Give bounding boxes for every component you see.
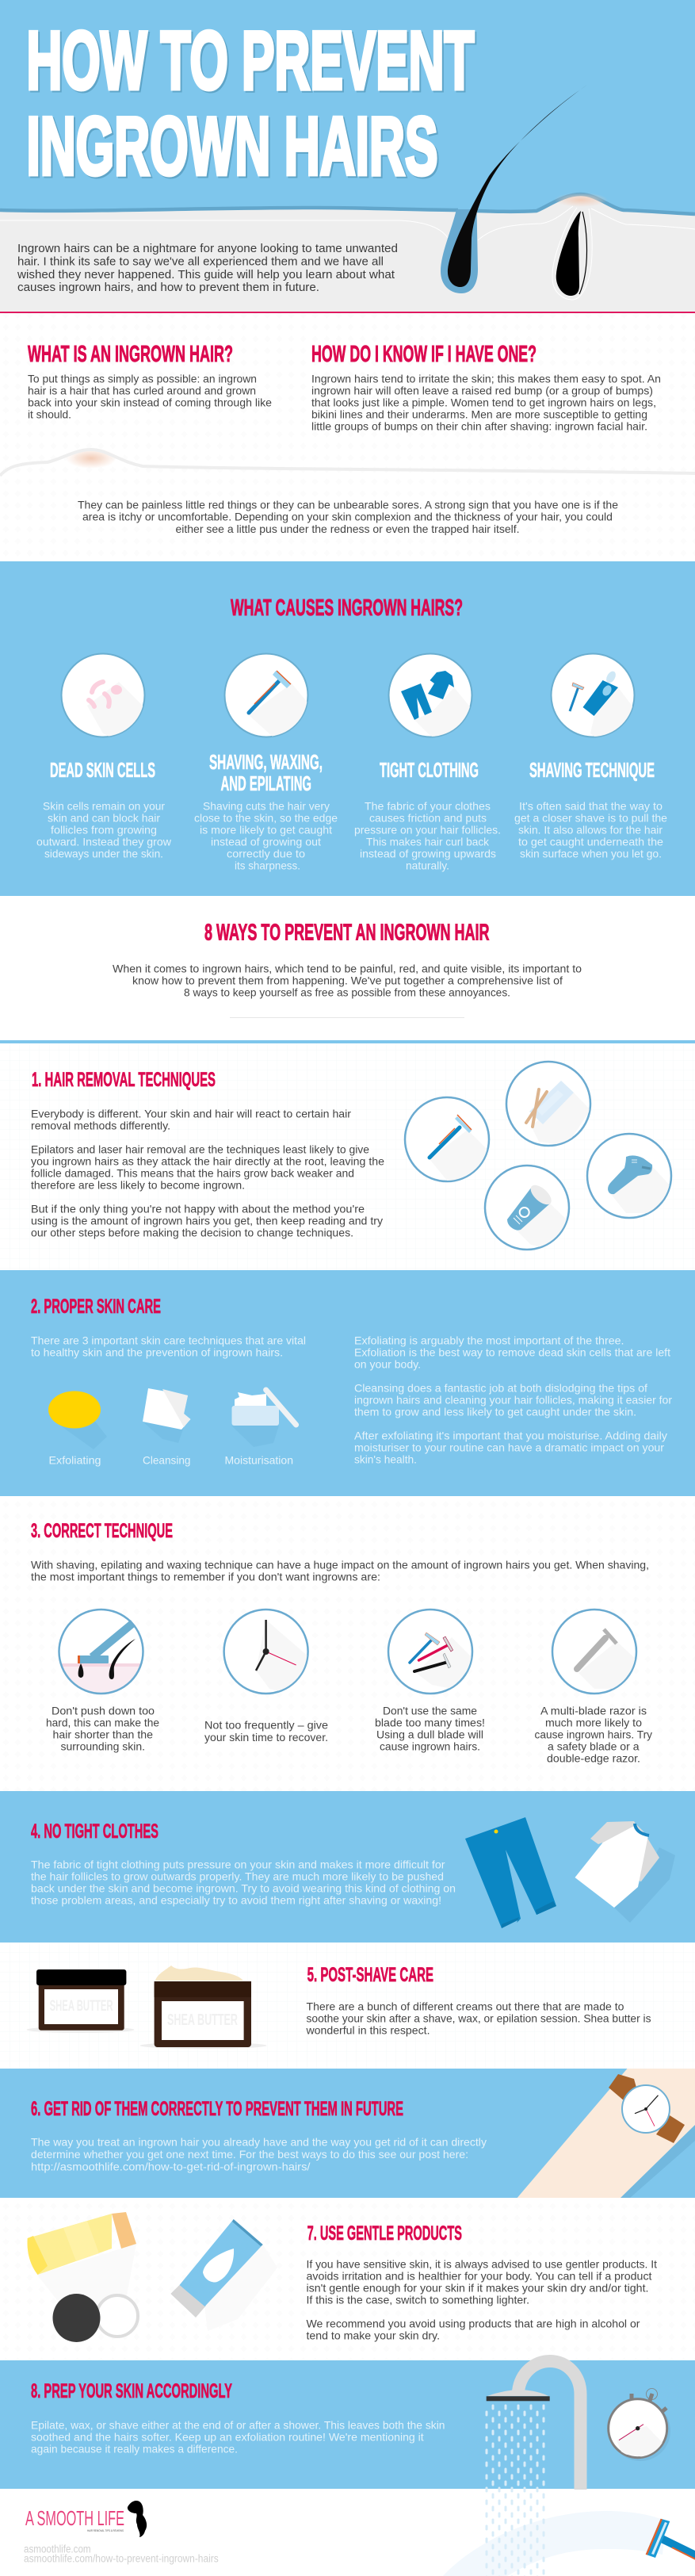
icon: clothes xyxy=(388,653,472,737)
text: step 1: you ingrown hairs as they attack the hair directly at the root, leaving the xyxy=(31,1154,384,1167)
skin surface line xyxy=(0,194,695,214)
text: step 1: therefore are less likely to become ingrown. xyxy=(31,1178,245,1191)
icon: open shea butter jar: SHEA BUTTER xyxy=(167,2011,238,2029)
cause: shaving, waxing, epilating: SHAVING, WAXING, xyxy=(209,750,323,774)
icon: razor and foam can xyxy=(550,653,636,737)
panel: 2 proper skin care xyxy=(0,1270,695,1496)
text: what is: To put things as simply as possible: an ingrown xyxy=(28,373,257,385)
cause: dead skin cells xyxy=(36,758,172,859)
cause: shaving, waxing, epilating: its sharpness. xyxy=(235,859,300,872)
text: step 7: If you have sensitive skin, it is always advised to use gentler products. It xyxy=(306,2258,657,2271)
text: same blade: Using a dull blade will xyxy=(376,1728,483,1741)
text: step 3: the most important things to remember if you don't want ingrowns are: xyxy=(31,1570,380,1583)
icon: razor xyxy=(223,653,309,737)
text: step 2 right: moisturiser to your routine can have a dramatic impact on your xyxy=(354,1441,664,1454)
icon: epilator circle xyxy=(485,1166,572,1250)
text: step 4: those problem areas, and especially try to avoid them right after shaving or waxing! xyxy=(31,1893,441,1906)
text: multi-blade: cause ingrown hairs. Try xyxy=(534,1728,652,1741)
text: step 5: soothe your skin after a shave, wax, or epilation session. Shea butter is xyxy=(306,2012,651,2025)
logo: HAIR REMOVAL TIPS & REVIEWS xyxy=(87,2529,124,2532)
panel: 8 prep your skin xyxy=(0,2360,695,2489)
text: step 7: If this is the case, switch to something lighter. xyxy=(306,2293,529,2306)
cause: shaving technique: It's often said that the way to xyxy=(519,799,663,812)
cause: tight clothing: pressure on your hair follicles. xyxy=(354,823,501,836)
text: how do I know: ingrown hair will often leave a raised red bump (or a group of bumps) xyxy=(311,384,653,396)
cause: shaving technique: skin. It also allows for the hair xyxy=(518,823,663,836)
text: step 2 left: to healthy skin and the prevention of ingrown hairs. xyxy=(31,1346,283,1359)
text: step 1: Everybody is different. Your skin and hair will react to certain hair xyxy=(31,1107,351,1120)
skin cross-section xyxy=(0,194,695,312)
text: symptoms: either see a little pus under the redness or even the trapped hair itself. xyxy=(176,522,520,535)
text: step 1 xyxy=(31,1107,384,1238)
icon: moisturiser jar xyxy=(225,1390,296,1467)
icon: footer razor xyxy=(646,2519,695,2560)
cause: dead skin cells: follicles from growing xyxy=(51,823,157,836)
text: push down: hair shorter than the xyxy=(52,1728,153,1741)
logo: A SMOOTH LIFE xyxy=(25,2506,124,2530)
text: step 1: follicle damaged. This means that the hairs grow back weaker and xyxy=(31,1167,354,1180)
text: step 2 right: After exfoliating it's important that you moisturise. Adding daily xyxy=(354,1429,667,1441)
text: symptoms xyxy=(78,498,618,535)
cause: tight clothing: naturally. xyxy=(406,859,449,872)
text: step 1: But if the only thing you're not happy with about the method you're xyxy=(31,1202,365,1215)
heading: step 1: 1. HAIR REMOVAL TECHNIQUES xyxy=(32,1069,216,1091)
panel: 5 post-shave care xyxy=(0,1943,695,2069)
panel: 4 no tight clothes xyxy=(0,1791,695,1943)
icon: shower xyxy=(485,2361,580,2576)
cause: tight clothing: The fabric of your clothes xyxy=(365,799,491,812)
heading: step 8: 8. PREP YOUR SKIN ACCORDINGLY xyxy=(31,2380,232,2402)
icon: arm with watch xyxy=(517,2069,695,2198)
cause: shaving, waxing, epilating: AND EPILATING xyxy=(220,771,311,795)
text: step 4: the hair follicles to grow outwards properly. They are much more likely to be pushed xyxy=(31,1870,444,1882)
cause: dead skin cells: DEAD SKIN CELLS xyxy=(50,758,155,782)
intro text: causes ingrown hairs, and how to prevent them in future. xyxy=(17,281,319,294)
text: step 1: our other steps before making the decision to change techniques. xyxy=(31,1226,353,1238)
text: same blade: cause ingrown hairs. xyxy=(380,1740,480,1752)
heading: step 5: 5. POST-SHAVE CARE xyxy=(307,1964,433,1986)
text: step 6: http://asmoothlife.com/how-to-get-rid-of-ingrown-hairs/ xyxy=(31,2160,311,2172)
source links: asmoothlife.com/how-to-prevent-ingrown-hairs xyxy=(24,2553,219,2564)
text: step 8 xyxy=(31,2418,445,2455)
icon: t-shirt xyxy=(575,1821,675,1923)
cause: shaving, waxing, epilating: correctly due to xyxy=(227,847,305,859)
text: step 3 xyxy=(31,1559,649,1583)
panel: what causes ingrown hairs xyxy=(0,561,695,896)
heading: causes: WHAT CAUSES INGROWN HAIRS? xyxy=(231,595,463,621)
text: push down: Don't push down too xyxy=(52,1705,155,1717)
cause: tight clothing: TIGHT CLOTHING xyxy=(380,758,479,782)
text: 8 ways: 8 ways to keep yourself as free as possible from these annoyances. xyxy=(184,986,510,999)
text: step 7: avoids irritation and is healthier for your body. You can tell if a product xyxy=(306,2269,652,2282)
icon: wax strip circle xyxy=(506,1062,590,1146)
text: symptoms: They can be painless little red things or they can be unbearable sores. A strong sign that you have one is if the xyxy=(78,498,618,511)
panel: 7 use gentle products xyxy=(0,2198,695,2360)
icon: compact mirror xyxy=(52,2294,138,2342)
icon: pressing razor xyxy=(58,1608,144,1695)
cause: shaving technique: to get caught underneath the xyxy=(518,836,663,848)
heading: step 6: 6. GET RID OF THEM CORRECTLY TO PREVENT THEM IN FUTURE xyxy=(31,2098,403,2120)
logo xyxy=(25,2501,147,2537)
text: step 4: back under the skin and become ingrown. Try to avoid wearing this kind of clothing on xyxy=(31,1882,456,1895)
text: multi-blade: A multi-blade razor is xyxy=(540,1705,647,1717)
text: step 2 right: skin's health. xyxy=(354,1453,417,1465)
text: step 2 right: on your body. xyxy=(354,1357,421,1370)
text: step 2 right: ingrown hairs and cleaning your hair follicles, making it easier for xyxy=(354,1394,672,1407)
icon: dead skin cells xyxy=(60,653,146,737)
cause: dead skin cells: Skin cells remain on your xyxy=(43,799,165,812)
icon: yellow tube xyxy=(28,2212,136,2319)
panel: 1 hair removal techniques xyxy=(0,1043,695,1270)
text: push down: surrounding skin. xyxy=(60,1740,145,1752)
text: step 7: We recommend you avoid using products that are high in alcohol or xyxy=(306,2317,640,2329)
source links: asmoothlife.com xyxy=(24,2543,91,2555)
icon: blue tube xyxy=(170,2219,277,2331)
text: step 5 xyxy=(305,2000,651,2036)
text: step 2 right: them to grow and less likely to get caught under the skin. xyxy=(354,1405,636,1418)
cause: tight clothing xyxy=(354,758,501,872)
text: step 2 left xyxy=(31,1334,306,1359)
heading: step 2: 2. PROPER SKIN CARE xyxy=(31,1296,161,1318)
icon: exfoliating sponge xyxy=(48,1391,107,1467)
icon: moisturiser jar: Moisturisation xyxy=(225,1454,293,1467)
cause: shaving, waxing, epilating: Shaving cuts the hair very xyxy=(203,799,330,812)
cause: dead skin cells: sideways under the skin. xyxy=(44,847,163,859)
cause: dead skin cells: skin and can block hair xyxy=(48,812,160,825)
panel: hero xyxy=(0,0,695,312)
text: what is: back into your skin instead of coming through like xyxy=(28,396,272,409)
cause: shaving technique: skin surface when you let go. xyxy=(520,847,662,859)
heading: step 4: 4. NO TIGHT CLOTHES xyxy=(31,1820,158,1843)
decorative curve: footer xyxy=(443,2511,666,2576)
text: how do I know: that looks just like a pimple. Women tend to get ingrown hairs on legs, xyxy=(311,396,656,409)
icon: jeans xyxy=(465,1817,556,1928)
text: how do I know: little groups of bumps on their chin after shaving: ingrown facial hair. xyxy=(311,420,647,433)
icon: closed shea butter jar: SHEA BUTTER xyxy=(50,1998,113,2015)
cause: shaving technique: get a closer shave is to pull the xyxy=(514,812,667,825)
cause: shaving, waxing, epilating xyxy=(194,750,338,872)
heading: what is: WHAT IS AN INGROWN HAIR? xyxy=(28,342,233,367)
cause: shaving technique xyxy=(514,758,667,859)
text: step 5: There are a bunch of different creams out there that are made to xyxy=(306,2000,624,2012)
text: how do I know xyxy=(311,373,661,433)
text: multi-blade: double-edge razor. xyxy=(547,1752,640,1765)
text: step 7 xyxy=(306,2258,657,2342)
text: step 5: wonderful in this respect. xyxy=(305,2023,430,2036)
text: 8 ways: know how to prevent them from happening. We've put together a comprehensive list of xyxy=(132,974,563,986)
text: how do I know: bikini lines and their underarms. Men are more susceptible to getting xyxy=(311,408,647,420)
heading: step 7: 7. USE GENTLE PRODUCTS xyxy=(307,2222,462,2245)
cause: shaving, waxing, epilating: instead of growing out xyxy=(211,836,321,848)
intro text: wished they never happened. This guide will help you learn about what xyxy=(17,268,395,281)
icon: stopwatch xyxy=(609,2388,670,2461)
skin bump line xyxy=(0,448,695,476)
icon: clock xyxy=(224,1610,309,1697)
text: symptoms: area is itchy or uncomfortable. Depending on your skin complexion and the thickness of your hair, you could xyxy=(82,511,613,523)
text: multi-blade: a safety blade or a xyxy=(548,1740,640,1752)
title: INGROWN HAIRS xyxy=(29,102,439,194)
text: step 1: removal methods differently. xyxy=(31,1120,170,1132)
text: what is: it should. xyxy=(28,408,71,420)
cause: tight clothing: This makes hair curl back xyxy=(366,836,490,848)
bump redness xyxy=(554,193,608,207)
text: step 1: Epilators and laser hair removal are the techniques least likely to give xyxy=(31,1143,369,1156)
icon: laser device circle xyxy=(587,1134,674,1218)
icon: cleansing wipe xyxy=(143,1388,190,1467)
panel: what is an ingrown hair xyxy=(0,313,695,561)
text: step 7: isn't gentle enough for your skin if it makes your skin dry and/or tight. xyxy=(306,2282,648,2295)
text: multi-blade: much more likely to xyxy=(545,1716,642,1728)
intro text xyxy=(17,242,398,294)
source links xyxy=(24,2543,219,2564)
text: push down: hard, this can make the xyxy=(46,1716,159,1728)
text: frequency: Not too frequently – give xyxy=(204,1719,328,1732)
text: step 4 xyxy=(31,1858,456,1906)
text: 8 ways: When it comes to ingrown hairs, which tend to be painful, red, and quite visible, its important to xyxy=(113,963,582,975)
text: step 8: soothed and the hairs softer. Keep up an exfoliation routine! We're mentioning it xyxy=(31,2431,424,2444)
icon: open shea butter jar xyxy=(139,1965,266,2049)
text: frequency: your skin time to recover. xyxy=(204,1731,328,1743)
text: step 2 right: Exfoliating is arguably the most important of the three. xyxy=(354,1334,624,1346)
title xyxy=(27,15,475,194)
text: step 2 left: There are 3 important skin care techniques that are vital xyxy=(31,1334,306,1346)
text: 8 ways xyxy=(113,963,582,999)
intro text: hair. I think its safe to say we've all experienced them and we have all xyxy=(17,255,384,268)
icon: closed shea butter jar xyxy=(27,1969,135,2033)
text: step 6: determine whether you get one next time. For the best ways to do this see our post here: xyxy=(31,2148,468,2161)
cause: tight clothing: causes friction and puts xyxy=(369,812,487,825)
text: how do I know: Ingrown hairs tend to irritate the skin; this makes them easy to spot. An xyxy=(311,373,661,385)
pink divider xyxy=(0,312,695,313)
intro text: Ingrown hairs can be a nightmare for anyone looking to tame unwanted xyxy=(17,242,398,255)
hair follicle xyxy=(441,209,478,293)
title: INGROWN HAIRS xyxy=(27,101,437,193)
text: step 2 right: Cleansing does a fantastic job at both dislodging the tips of xyxy=(354,1381,647,1394)
icon: safety razor xyxy=(552,1610,638,1694)
heading: how do I know: HOW DO I KNOW IF I HAVE ONE? xyxy=(311,342,537,367)
cause: tight clothing: instead of growing upwards xyxy=(360,847,496,859)
text: same blade: Don't use the same xyxy=(383,1705,477,1717)
text: frequency xyxy=(204,1719,328,1743)
icon: exfoliating sponge: Exfoliating xyxy=(49,1454,101,1467)
panel: 3 correct technique xyxy=(31,1522,652,1765)
icon: ingrown hair xyxy=(552,208,592,300)
heading: step 3: 3. CORRECT TECHNIQUE xyxy=(31,1520,173,1542)
text: step 2 right xyxy=(354,1334,672,1465)
text: step 1: using is the amount of ingrown hairs you get, then keep reading and try xyxy=(31,1215,383,1227)
icon: three razors xyxy=(388,1610,475,1694)
text: what is: hair is a hair that has curled around and grown xyxy=(28,384,256,396)
cause: shaving, waxing, epilating: is more likely to get caught xyxy=(200,823,332,836)
text: same blade xyxy=(375,1705,485,1752)
text: step 8: again because it really makes a difference. xyxy=(31,2442,238,2455)
icon: hair xyxy=(448,85,587,287)
panel: 8 ways intro xyxy=(113,920,582,1018)
text: same blade: blade too many times! xyxy=(375,1716,485,1728)
text: step 7: tend to make your skin dry. xyxy=(306,2329,440,2342)
cause: shaving, waxing, epilating: close to the skin, so the edge xyxy=(194,812,338,825)
heading: 8 ways: 8 WAYS TO PREVENT AN INGROWN HAIR xyxy=(204,920,490,945)
text: step 6 xyxy=(31,2136,487,2172)
panel: 6 get rid of them correctly xyxy=(0,2069,695,2198)
icon: cleansing wipe: Cleansing xyxy=(143,1454,190,1467)
text: step 3: With shaving, epilating and waxing technique can have a huge impact on the amount of ingrown hairs you get. When shaving, xyxy=(31,1559,649,1571)
text: push down xyxy=(46,1705,159,1752)
cause: dead skin cells: outward. Instead they grow xyxy=(36,836,172,848)
text: step 6: The way you treat an ingrown hair you already have and the way you get rid of it can directly xyxy=(31,2136,487,2149)
text: multi-blade xyxy=(534,1705,652,1765)
skin contour lines xyxy=(0,206,695,240)
text: step 8: Epilate, wax, or shave either at the end of or after a shower. This leaves both the skin xyxy=(31,2418,445,2431)
text: step 2 right: Exfoliation is the best way to remove dead skin cells that are left xyxy=(354,1346,670,1359)
text: what is xyxy=(28,373,272,420)
text: step 4: The fabric of tight clothing puts pressure on your skin and makes it more difficult for xyxy=(31,1858,445,1871)
icon: razor circle xyxy=(405,1097,495,1185)
